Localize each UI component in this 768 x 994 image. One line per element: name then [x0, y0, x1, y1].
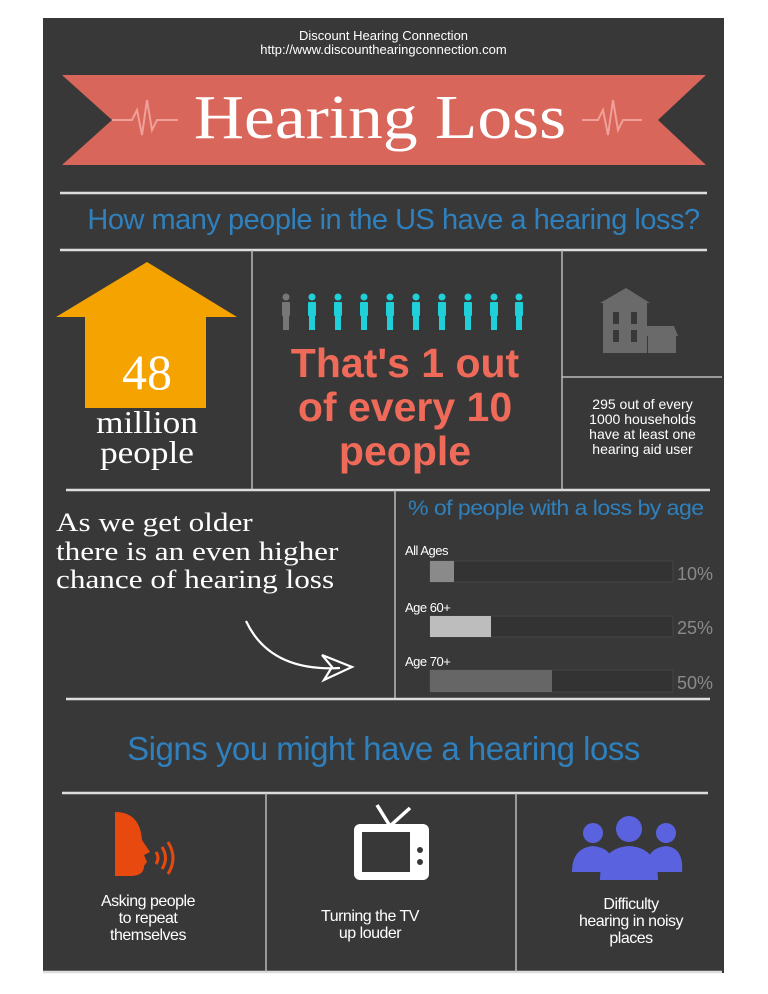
- sign: tv: Turning the TV: [321, 908, 419, 925]
- header source text: [260, 28, 507, 57]
- dividers: [43, 193, 722, 972]
- header source text: Discount Hearing Connection: [299, 28, 468, 43]
- stat: households: 1000 households: [589, 411, 696, 427]
- bar chart: 50%: [677, 673, 713, 693]
- stat: million people: people: [100, 434, 194, 470]
- stat: 1 out of 10: people: [339, 428, 471, 474]
- icon: speaking face: [115, 812, 173, 876]
- header source text: http://www.discounthearingconnection.com: [260, 42, 507, 57]
- sign: repeat: [101, 893, 195, 944]
- sign: repeat: Asking people: [101, 893, 195, 910]
- chart heading: % of people with a loss by age: [408, 497, 704, 520]
- bar chart: 25%: [677, 618, 713, 638]
- icon: group of people: [572, 816, 682, 880]
- sign: noisy: places: [609, 930, 653, 947]
- question heading: How many people in the US have a hearing loss?: [87, 204, 700, 236]
- title text: Hearing Loss: [194, 84, 566, 152]
- sign: noisy: [579, 896, 684, 947]
- age text: there is an even higher: [56, 536, 338, 566]
- bar chart: [405, 543, 713, 693]
- signs heading: Signs you might have a hearing loss: [127, 730, 640, 767]
- stat: households: have at least one: [589, 426, 696, 442]
- sign: repeat: themselves: [110, 927, 186, 944]
- bar chart: 10%: [677, 564, 713, 584]
- icon: tv: [354, 805, 429, 880]
- sign: repeat: to repeat: [119, 910, 177, 927]
- icon: people row: [282, 294, 523, 330]
- icon: house: [600, 288, 678, 353]
- stat: 1 out of 10: That's 1 out: [291, 340, 519, 386]
- stat: million people: [96, 404, 198, 470]
- stat: 1 out of 10: of every 10: [298, 384, 512, 430]
- age text: As we get older: [56, 508, 253, 537]
- sign: tv: [321, 908, 420, 942]
- sign: noisy: hearing in noisy: [579, 913, 683, 930]
- bar chart: All Ages: [405, 543, 449, 558]
- bar chart: Age 70+: [405, 654, 450, 669]
- stat: households: hearing aid user: [592, 441, 693, 457]
- age text: chance of hearing loss: [56, 565, 334, 594]
- bar chart: Age 60+: [405, 600, 450, 615]
- stat: 48: 48: [122, 344, 172, 400]
- stat: households: [589, 396, 696, 457]
- sign: tv: up louder: [339, 925, 401, 942]
- stat: million people: million: [96, 404, 198, 440]
- sign: noisy: Difficulty: [603, 896, 659, 913]
- stat: 1 out of 10: [291, 340, 519, 474]
- arrow: curved pointer: [246, 621, 352, 680]
- age text: [56, 508, 338, 594]
- stat: households: 295 out of every: [592, 396, 693, 412]
- icon: orange arrow: [56, 262, 237, 408]
